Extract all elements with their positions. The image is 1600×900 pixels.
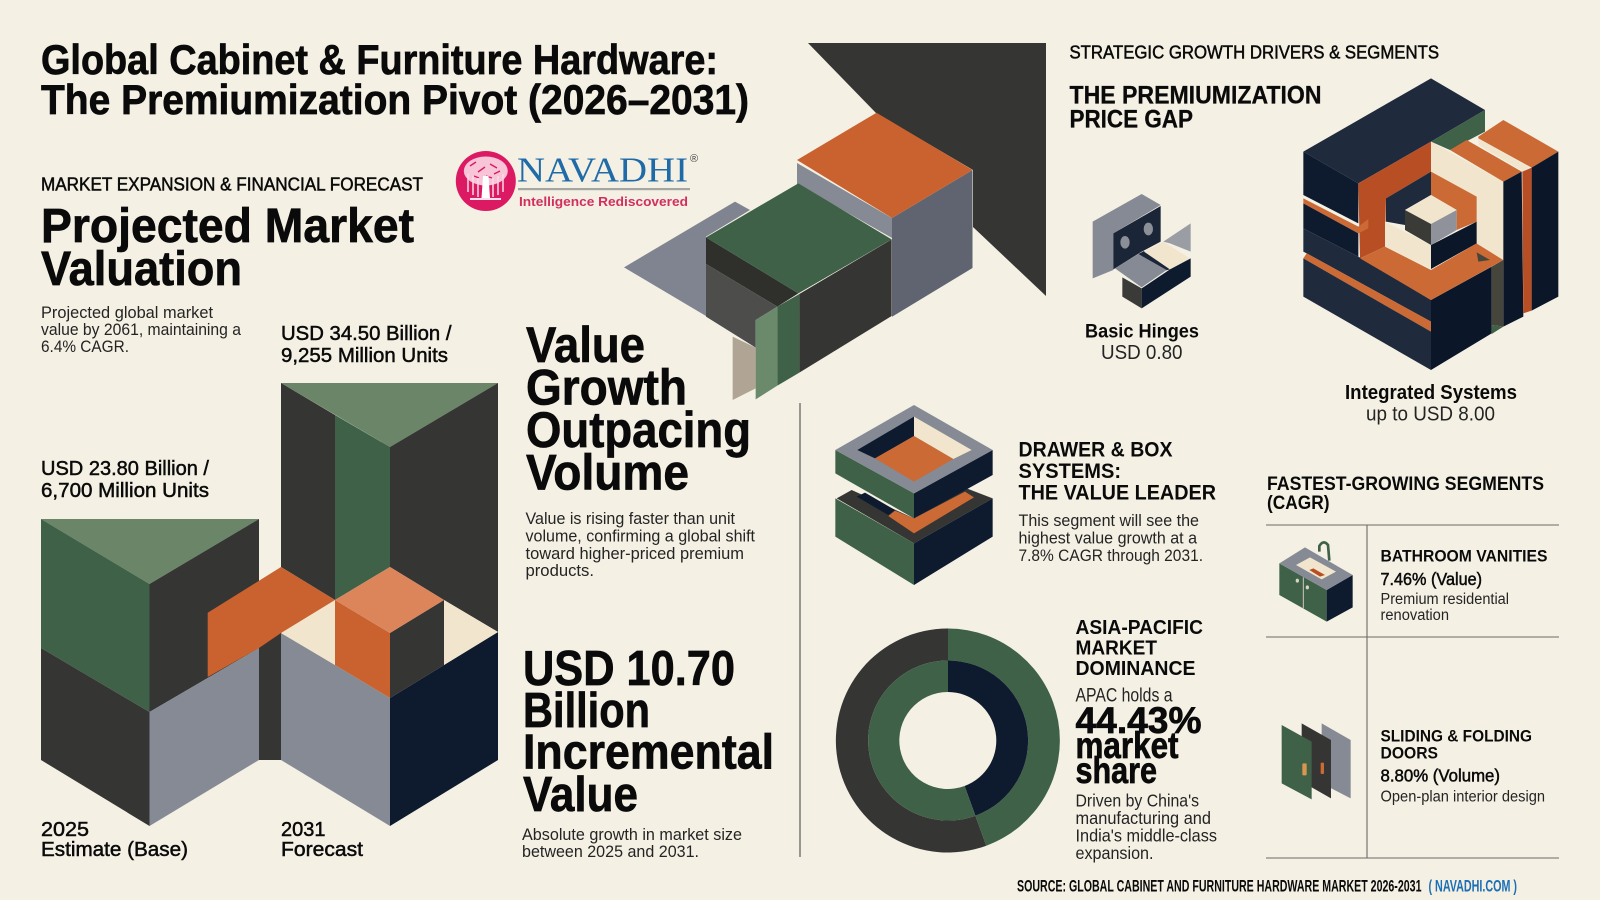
labels: 2031 forecast: 2031 — [281, 818, 326, 841]
text: bathroom vanities: 7.46% (Value) — [1380, 569, 1482, 589]
text: sliding and folding doors: 8.80% (Volume) — [1380, 766, 1500, 786]
heading: drawer and box systems: DRAWER & BOX — [1018, 438, 1173, 462]
chart: isometric 2025 and 2031 columns — [41, 383, 498, 826]
label: basic hinges price: USD 0.80 — [1101, 341, 1182, 364]
heading: APAC dominance — [1076, 616, 1203, 680]
text: valuation description: Projected global market — [41, 303, 213, 322]
outer ring: APAC share — [948, 628, 1060, 846]
text: incremental value description: Absolute growth in market size — [522, 825, 742, 844]
labels: 2025 estimate: 2025 — [41, 818, 89, 841]
column: 2031 — [259, 383, 498, 826]
table grid lines — [1266, 525, 1559, 858]
text: bathroom vanities: renovation — [1380, 607, 1449, 624]
labels: 2025 estimate — [41, 818, 188, 861]
heading: incremental value: Billion — [523, 683, 650, 738]
icon: integrated system cube — [1303, 78, 1558, 370]
text: incremental value description — [522, 825, 742, 861]
title — [41, 36, 749, 123]
labels: 2031 forecast — [281, 818, 363, 861]
text: APAC description: expansion. — [1076, 843, 1154, 863]
logo: Navadhi: NAVADHI — [517, 151, 688, 190]
text: sliding and folding doors: Open-plan interior design — [1380, 789, 1545, 806]
section heading: market expansion: MARKET EXPANSION & FINANCIAL FORECAST — [41, 174, 423, 194]
text: value growth description: products. — [526, 561, 594, 580]
text: valuation description: value by 2061, maintaining a — [41, 320, 241, 339]
heading: value growth outpacing volume — [526, 317, 751, 500]
outer ring: rest of world — [836, 628, 986, 852]
inner ring: remainder — [868, 660, 975, 820]
labels: 2031 forecast: Forecast — [281, 838, 363, 861]
label: integrated systems price: Integrated Systems — [1345, 382, 1517, 404]
icon: basic hinge — [1093, 194, 1191, 308]
text: APAC description: Driven by China's — [1076, 791, 1199, 811]
text: APAC description: India's middle-class — [1076, 826, 1217, 846]
icon: drawer box — [835, 405, 993, 585]
chart: APAC donut — [836, 628, 1060, 852]
heading: value growth outpacing volume: Volume — [526, 444, 689, 500]
heading: incremental value: USD 10.70 — [523, 641, 735, 696]
icon: sliding doors — [1282, 723, 1351, 799]
title: The Premiumization Pivot (2026–2031) — [41, 76, 749, 123]
heading: drawer and box systems: SYSTEMS: — [1018, 459, 1121, 483]
text: drawer description: highest value growth at a — [1018, 528, 1198, 548]
label: basic hinges price — [1085, 320, 1199, 364]
logo: Navadhi — [456, 151, 698, 211]
heading: value growth outpacing volume: Growth — [526, 360, 687, 416]
stat: APAC share: share — [1076, 750, 1157, 791]
text: APAC description — [1076, 791, 1217, 863]
heading: fastest-growing segments — [1267, 474, 1544, 514]
logo: Navadhi: ® — [690, 153, 698, 165]
heading: price gap — [1070, 82, 1322, 134]
heading: APAC dominance: MARKET — [1076, 636, 1157, 660]
text: APAC description: manufacturing and — [1076, 808, 1211, 828]
heading: incremental value: Value — [523, 767, 638, 822]
logo: Navadhi: Intelligence Rediscovered — [519, 194, 688, 209]
label: integrated systems price — [1345, 382, 1517, 426]
heading: fastest-growing segments: FASTEST-GROWING SEGMENTS — [1267, 474, 1544, 495]
icon: bathroom vanity — [1279, 542, 1353, 622]
label: basic hinges price: Basic Hinges — [1085, 320, 1199, 342]
stat: APAC share: APAC holds a — [1076, 686, 1173, 707]
labels: 2025 estimate: Estimate (Base) — [41, 838, 188, 861]
text: drawer description — [1018, 511, 1203, 565]
text: bathroom vanities — [1380, 547, 1548, 624]
stat: APAC share: 44.43% — [1076, 700, 1202, 741]
label: 2025 value: USD 23.80 Billion / — [41, 457, 209, 480]
heading: drawer and box systems: THE VALUE LEADER — [1018, 480, 1216, 504]
text: value growth description — [526, 509, 755, 580]
label: 2025 value — [41, 457, 209, 502]
connector: orange block — [208, 567, 335, 677]
heading: incremental value — [523, 641, 774, 822]
heading: incremental value: Incremental — [523, 724, 774, 780]
heading: value growth outpacing volume: Outpacing — [526, 402, 751, 458]
heading: projected market valuation: Valuation — [41, 243, 242, 296]
heading: projected market valuation — [41, 200, 414, 296]
text: drawer description: This segment will see the — [1018, 511, 1199, 530]
label: 2031 value: 9,255 Million Units — [281, 344, 448, 367]
label: 2025 value: 6,700 Million Units — [41, 479, 209, 502]
divider — [799, 403, 801, 857]
graphic: isometric upward arrow — [624, 43, 1046, 400]
heading: value growth outpacing volume: Value — [526, 317, 645, 373]
heading: APAC dominance: DOMINANCE — [1076, 657, 1196, 680]
title: Global Cabinet & Furniture Hardware: — [41, 36, 718, 83]
text: sliding and folding doors — [1380, 727, 1545, 806]
text: drawer description: 7.8% CAGR through 2031. — [1018, 546, 1203, 565]
source line: ( NAVADHI.COM ) — [1428, 878, 1517, 896]
text: valuation description: 6.4% CAGR. — [41, 337, 129, 356]
heading: drawer and box systems — [1018, 438, 1216, 504]
text: value growth description: toward higher-priced premium — [526, 544, 744, 563]
section heading: strategic drivers: STRATEGIC GROWTH DRIVERS & SEGMENTS — [1070, 41, 1439, 62]
text: sliding and folding doors: SLIDING & FOLDING — [1380, 727, 1532, 746]
text: bathroom vanities: BATHROOM VANITIES — [1380, 547, 1548, 566]
column: 2025 — [41, 519, 259, 826]
text: sliding and folding doors: DOORS — [1380, 744, 1438, 763]
heading: projected market valuation: Projected Market — [41, 200, 414, 253]
heading: APAC dominance: ASIA-PACIFIC — [1076, 616, 1203, 639]
label: integrated systems price: up to USD 8.00 — [1366, 403, 1495, 426]
stat: APAC share — [1076, 686, 1202, 791]
text: valuation description — [41, 303, 241, 356]
inner ring: APAC share — [948, 660, 1028, 816]
stat: APAC share: market — [1076, 725, 1178, 766]
label: 2031 value: USD 34.50 Billion / — [281, 322, 452, 345]
text: bathroom vanities: Premium residential — [1380, 591, 1509, 608]
text: value growth description: Value is rising faster than unit — [526, 509, 735, 528]
text: value growth description: volume, confirming a global shift — [526, 526, 755, 546]
heading: price gap: PRICE GAP — [1070, 106, 1193, 134]
heading: price gap: THE PREMIUMIZATION — [1070, 82, 1322, 110]
heading: fastest-growing segments: (CAGR) — [1267, 493, 1330, 514]
icon: pink tree seal — [456, 151, 516, 211]
label: 2031 value — [281, 322, 452, 367]
text: incremental value description: between 2025 and 2031. — [522, 842, 699, 861]
